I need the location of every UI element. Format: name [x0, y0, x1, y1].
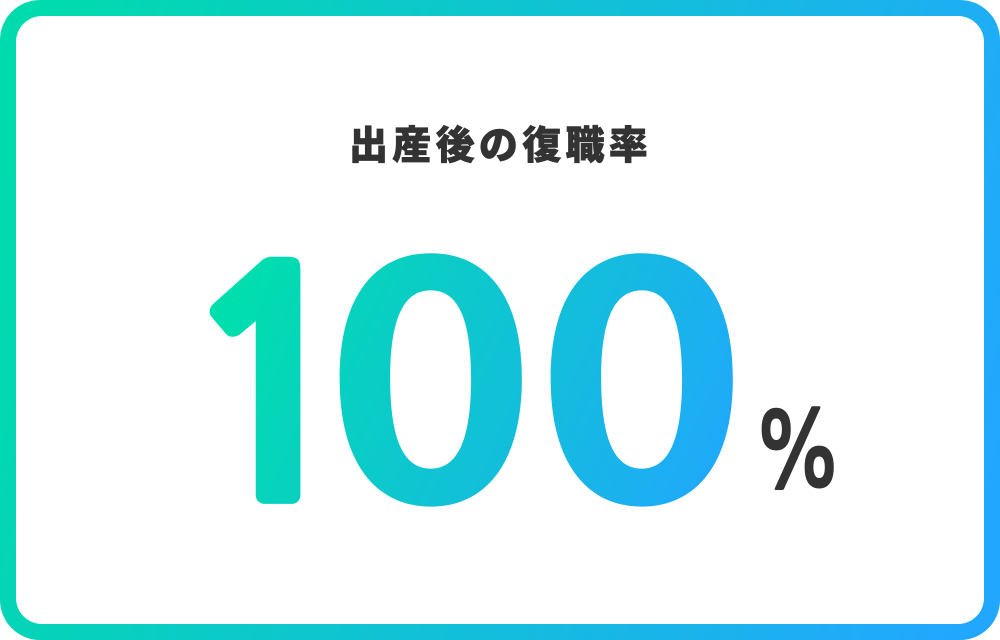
big number: 100: 0 — [324, 120, 538, 597]
big number: 100: 1 — [174, 237, 368, 545]
big number: 100: 0 — [535, 120, 749, 597]
big number: 100 — [174, 120, 749, 597]
heading: return-to-work rate: 出産後の復職率 — [349, 115, 652, 171]
percent sign: % — [752, 402, 843, 504]
